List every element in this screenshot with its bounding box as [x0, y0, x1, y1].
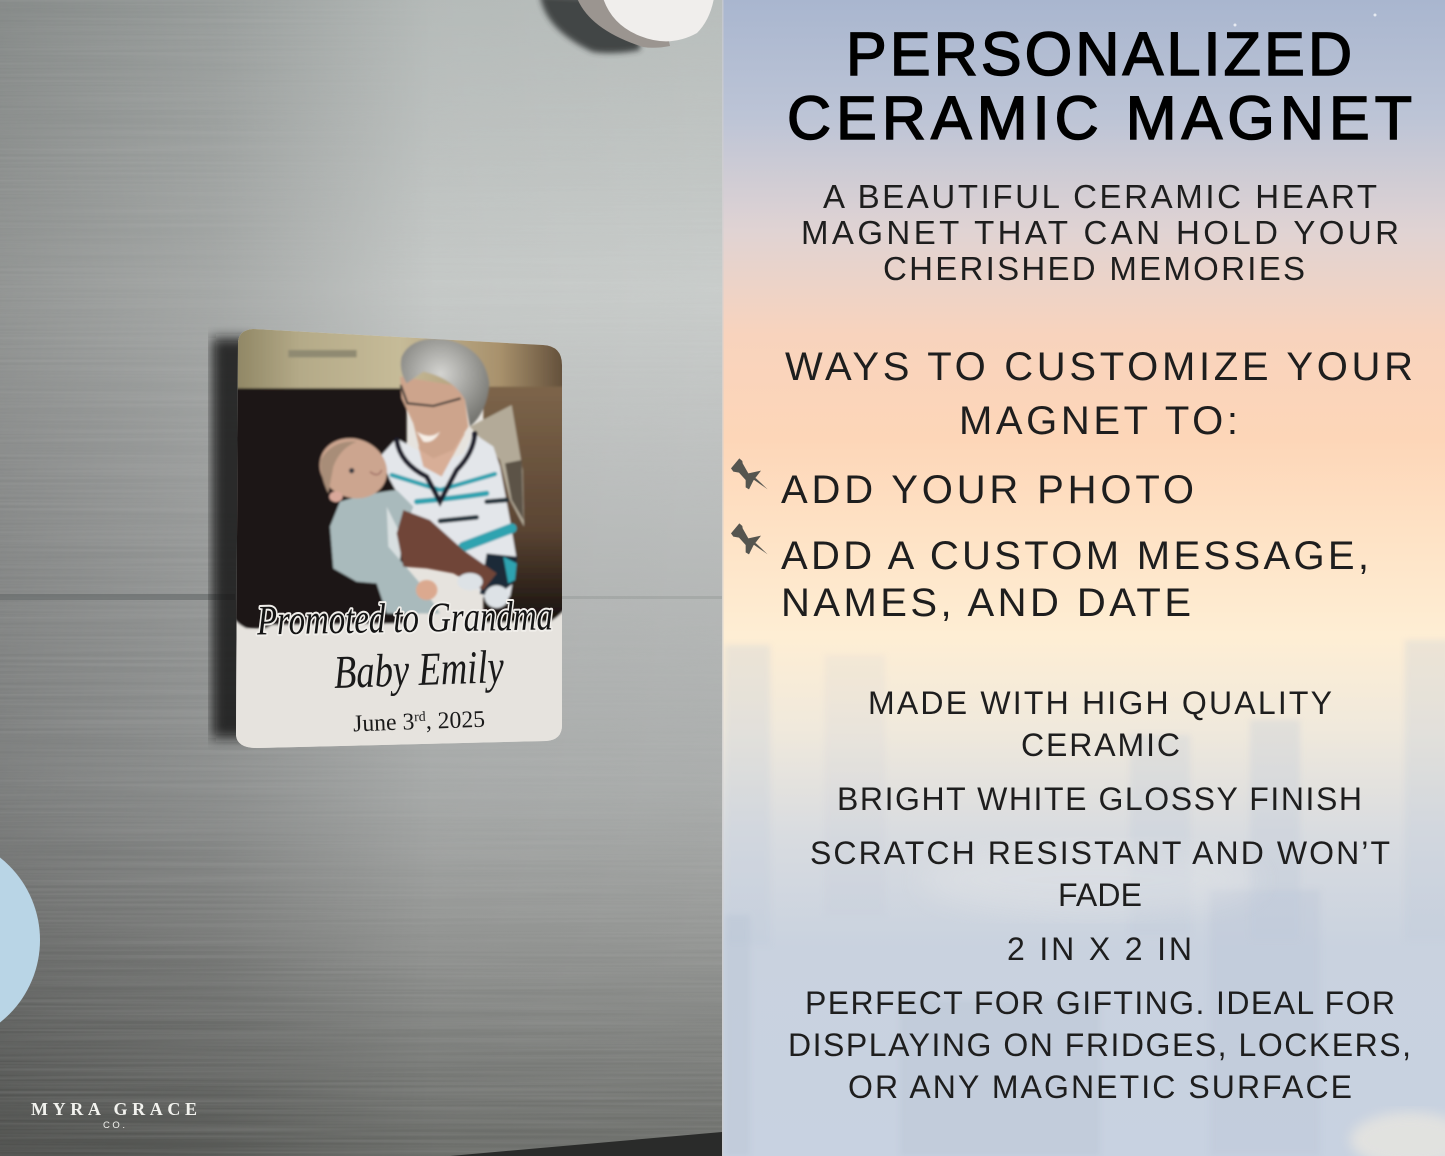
subtitle text: A BEAUTIFUL CERAMIC HEART — [823, 178, 1377, 215]
heading: ways to customize: MAGNET TO: — [959, 399, 1238, 443]
heading: ways to customize — [785, 345, 1413, 443]
white lower band — [233, 609, 565, 757]
icon: push pin 2 — [731, 523, 768, 554]
panel: fridge photo — [0, 0, 722, 1156]
feature list: DISPLAYING ON FRIDGES, LOCKERS, — [788, 1027, 1411, 1063]
background at right — [483, 387, 567, 627]
logo: Myra Grace Co.: MYRA GRACE — [31, 1099, 197, 1119]
subtitle text: CHERISHED MEMORIES — [883, 250, 1305, 287]
icon: push pin 1 — [731, 458, 768, 489]
dark sofa — [233, 388, 407, 628]
icon: white round magnet at top — [540, 0, 714, 53]
icon: blue round magnet at left — [0, 858, 40, 1022]
photo of grandmother and baby — [233, 325, 567, 757]
panel: ceramic photo magnet — [212, 325, 567, 757]
logo: Myra Grace Co. — [31, 1103, 196, 1128]
title — [787, 20, 1412, 152]
feature list — [788, 685, 1411, 1105]
glasses — [401, 385, 461, 406]
cushion — [470, 405, 524, 527]
wall — [238, 329, 562, 390]
list item: add your photo: ADD YOUR PHOTO — [781, 468, 1194, 512]
subtitle text — [801, 178, 1399, 287]
text: date: rd — [414, 710, 426, 725]
text: date: , 2025 — [425, 707, 485, 735]
heading: ways to customize: WAYS TO CUSTOMIZE YOUR — [785, 345, 1413, 389]
feature list: PERFECT FOR GIFTING. IDEAL FOR — [805, 985, 1395, 1021]
list item: add a custom message — [781, 534, 1369, 625]
shirt — [380, 433, 517, 600]
subtitle text: MAGNET THAT CAN HOLD YOUR — [801, 214, 1399, 251]
feature list: 2 IN X 2 IN — [1007, 931, 1192, 967]
baby hands and socks — [416, 580, 437, 600]
list item: add a custom message: NAMES, AND DATE — [781, 581, 1191, 625]
text: Baby Emily: Baby Emily — [333, 641, 505, 699]
feature list: CERAMIC — [1021, 727, 1180, 763]
list item: add a custom message: ADD A CUSTOM MESSAGE, — [781, 534, 1369, 578]
hair — [401, 339, 489, 427]
panel: sunset city background — [722, 0, 1445, 1156]
hand and arm — [397, 510, 497, 590]
baby head — [318, 436, 388, 500]
feature list: SCRATCH RESISTANT AND WON’T — [810, 835, 1390, 871]
text: date: June 3 — [353, 709, 416, 737]
feature list: BRIGHT WHITE GLOSSY FINISH — [837, 781, 1362, 817]
feature list: OR ANY MAGNETIC SURFACE — [848, 1069, 1352, 1105]
text: Promoted to Grandma: Promoted to Grandma — [256, 593, 553, 645]
feature list: MADE WITH HIGH QUALITY — [868, 685, 1332, 721]
title: CERAMIC MAGNET — [787, 84, 1412, 152]
baby body — [330, 490, 440, 613]
title: PERSONALIZED — [846, 20, 1352, 88]
logo: Myra Grace Co.: CO. — [103, 1120, 125, 1131]
neck and face — [418, 433, 465, 477]
feature list: FADE — [1058, 877, 1142, 913]
